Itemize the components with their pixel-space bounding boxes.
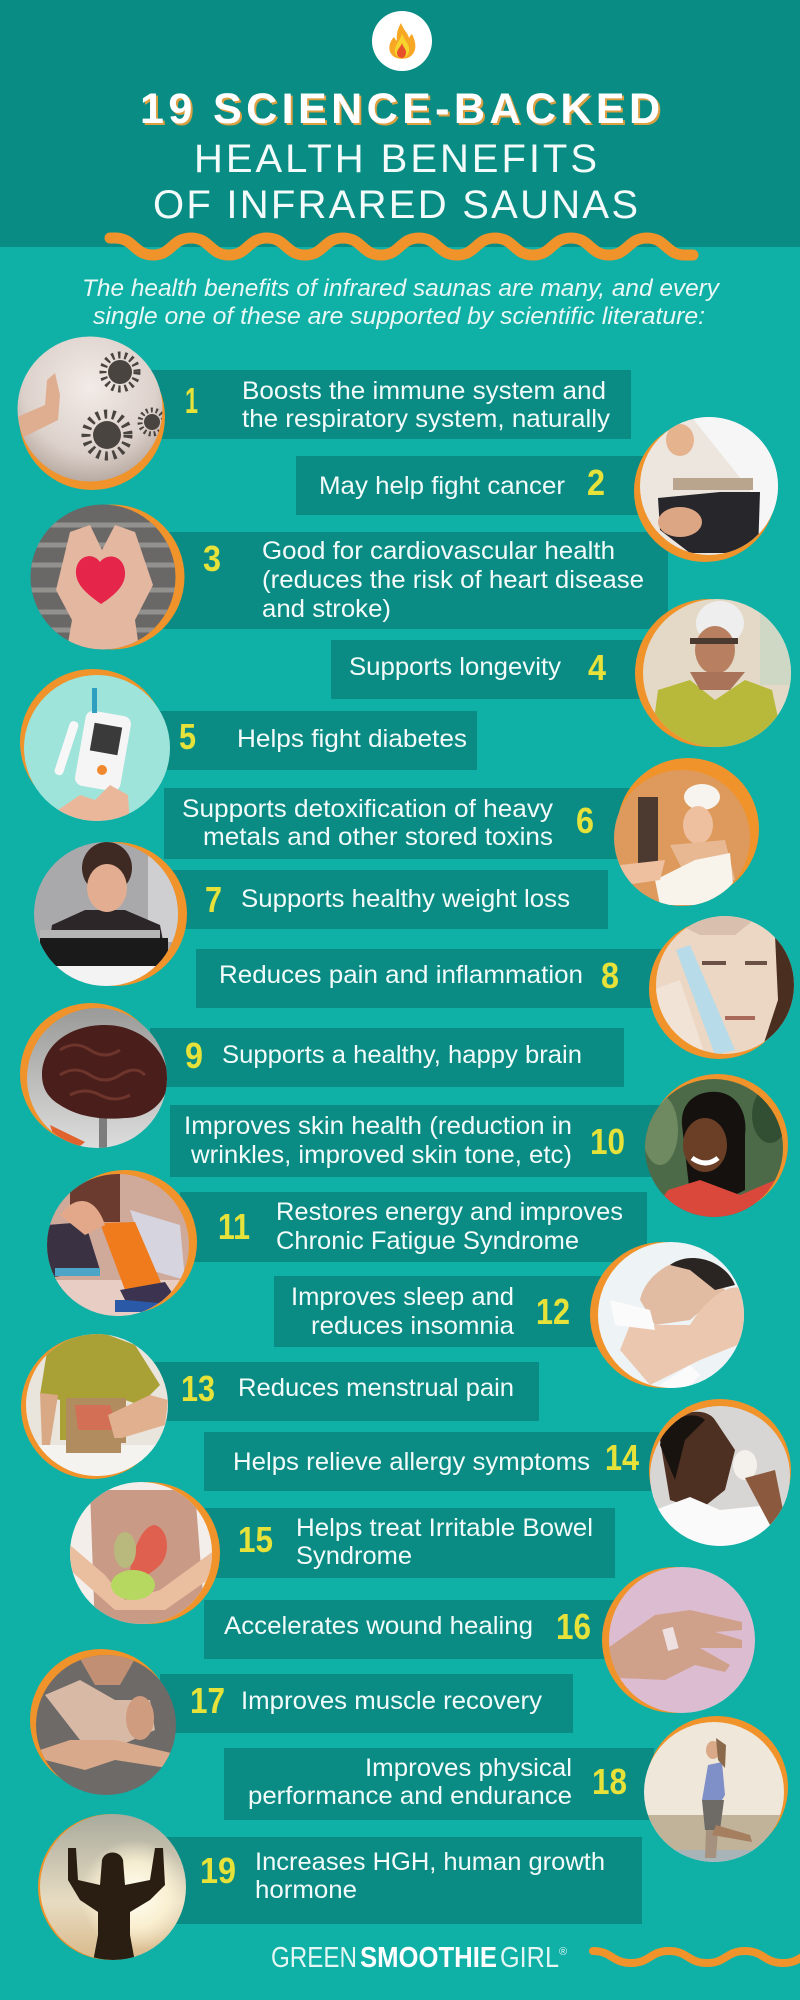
benefit descriptions [182,377,644,1904]
benefit numbers: 4 [588,647,606,688]
photo 1: virus particles and raised hand [15,336,165,490]
photo 7: smiling woman at weight scale [30,842,187,991]
benefit descriptions: wrinkles, improved skin tone, etc) [190,1141,572,1169]
photo 3: hands holding red heart [28,504,184,655]
benefit numbers: 15 [238,1519,273,1560]
logo: GreenSmoothieGirl: GIRL [500,1942,559,1974]
benefit descriptions: Chronic Fatigue Syndrome [276,1227,579,1255]
benefit numbers: 8 [601,955,619,996]
photo 18: woman running outdoors [640,1716,790,1865]
benefit numbers: 1 [185,380,198,421]
footer wave [593,1951,800,1963]
benefit numbers: 10 [590,1121,625,1162]
logo: GreenSmoothieGirl: ® [559,1946,567,1958]
benefit descriptions: metals and other stored toxins [203,823,553,851]
benefit numbers: 13 [181,1368,215,1409]
header band [0,0,800,247]
photo 12: sleeping couple [590,1242,750,1395]
photo 5: glucose meter on mint background [20,669,170,825]
title [140,85,660,227]
benefit numbers: 19 [200,1850,236,1891]
benefit descriptions: Syndrome [296,1542,412,1570]
benefit descriptions: Restores energy and improves [276,1198,623,1226]
benefit numbers: 7 [205,879,222,920]
logo: GreenSmoothieGirl: GREEN [271,1942,357,1974]
benefit bars [150,370,668,1924]
benefit descriptions: Improves sleep and [291,1283,514,1311]
photo 4: smiling older woman [635,595,795,750]
benefit descriptions: Helps treat Irritable Bowel [296,1514,593,1542]
benefit descriptions: reduces insomnia [311,1312,514,1340]
benefit descriptions: Accelerates wound healing [224,1612,533,1640]
logo: GreenSmoothieGirl [271,1942,567,1974]
benefit numbers: 17 [190,1680,225,1721]
benefit numbers: 14 [605,1437,639,1478]
benefit descriptions: and stroke) [262,595,391,623]
benefit descriptions: Supports longevity [349,653,562,681]
benefit descriptions: Improves physical [365,1754,572,1782]
photo 9: brown brain model [20,1003,168,1150]
benefit descriptions: Improves muscle recovery [241,1687,543,1715]
title: 19 SCIENCE-BACKED [140,85,660,133]
photo 14: man sneezing into tissue [649,1399,791,1550]
benefit descriptions: (reduces the risk of heart disease [262,566,644,594]
benefit descriptions: Supports healthy weight loss [241,885,570,913]
photo 8: woman with headache and blue ice pack [649,915,800,1059]
benefit descriptions: Reduces pain and inflammation [219,961,583,989]
benefit descriptions: the respiratory system, naturally [242,405,611,433]
benefit numbers: 16 [556,1606,591,1647]
photo 13: woman holding lower abdomen [21,1334,168,1479]
benefit numbers: 6 [576,800,594,841]
benefit numbers: 11 [218,1206,250,1247]
intro text [82,275,721,330]
benefit numbers: 18 [592,1761,627,1802]
photo circles [15,336,800,1962]
photo 16: hand with bandage on pink background [602,1567,755,1713]
benefit numbers: 3 [203,538,221,579]
benefit descriptions: Boosts the immune system and [242,377,606,405]
intro text: single one of these are supported by scientific literature: [93,303,705,330]
wave divider [110,238,693,255]
benefit descriptions: Reduces menstrual pain [238,1374,514,1402]
benefit numbers: 9 [185,1035,203,1076]
benefit descriptions: May help fight cancer [319,472,565,500]
benefit numbers: 2 [587,462,605,503]
photo 15: woman holding stomach illustration [70,1482,220,1630]
title: HEALTH BENEFITS [194,137,597,181]
title: OF INFRARED SAUNAS [153,183,638,227]
logo: GreenSmoothieGirl: SMOOTHIE [360,1942,497,1974]
benefit descriptions: performance and endurance [248,1782,572,1810]
benefit numbers: 5 [179,716,196,757]
benefit descriptions: hormone [255,1876,357,1904]
photo 2: doctor with tablet and patient [634,415,780,562]
icon: flame in white circle [372,11,432,71]
benefit descriptions: Helps relieve allergy symptoms [233,1448,590,1476]
benefit descriptions: Supports a healthy, happy brain [222,1041,582,1069]
photo 17: man holding sore shoulder [30,1649,180,1795]
benefit descriptions: Helps fight diabetes [237,725,467,753]
benefit descriptions: Good for cardiovascular health [262,537,615,565]
photo 19: silhouette of woman flexing against sunrise [38,1814,190,1962]
photo 10: smiling woman with glasses [642,1074,790,1225]
photo 6: woman in infrared sauna [614,758,759,906]
intro text: The health benefits of infrared saunas are many, and every [82,275,721,302]
photo 11: people stretching in exercise class [45,1170,197,1320]
benefit descriptions: Improves skin health (reduction in [184,1112,572,1140]
benefit numbers: 12 [536,1291,570,1332]
benefit numbers [179,380,639,1891]
benefit descriptions: Supports detoxification of heavy [182,795,554,823]
benefit descriptions: Increases HGH, human growth [255,1848,605,1876]
